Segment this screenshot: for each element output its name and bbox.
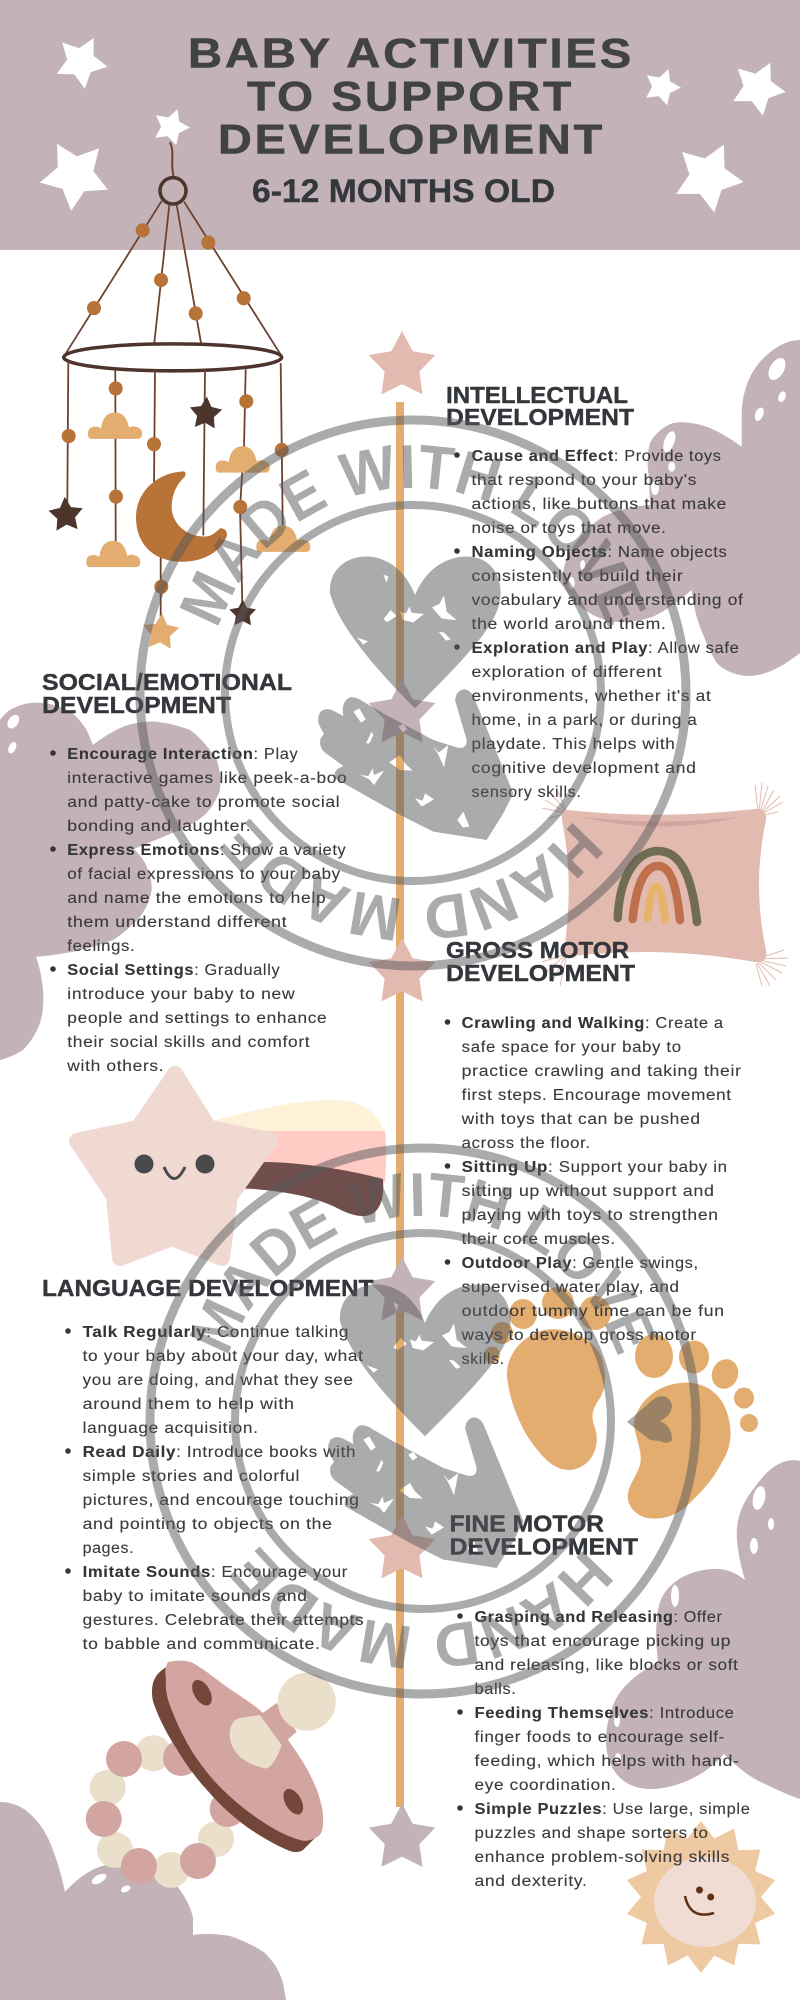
list: fine motor activities: feeding, which helps with hand- (474, 1753, 740, 1770)
list: gross motor activities: skills. (462, 1351, 505, 1368)
heading: gross motor: GROSS MOTOR (446, 937, 629, 963)
header band (0, 0, 800, 250)
list: social activities: bonding and laughter. (67, 818, 251, 835)
list: intellectual activities: playdate. This helps with (472, 736, 676, 753)
watermark stamp: upper: HAND MADE (219, 818, 603, 941)
illustration: baby feet (484, 1287, 758, 1519)
list: gross motor activities: supervised water play, and (462, 1279, 680, 1296)
title: TO SUPPORT (247, 72, 574, 119)
list: gross motor activities: across the floor. (462, 1135, 591, 1152)
illustration: pacifier (86, 1661, 336, 1888)
heading: intellectual: INTELLECTUAL (446, 382, 628, 408)
timeline: stars (369, 331, 435, 1867)
title: BABY ACTIVITIES (188, 29, 634, 76)
list: language activities: to babble and communicate. (83, 1636, 321, 1653)
list: fine motor activities: enhance problem-solving skills (474, 1849, 730, 1866)
list: fine motor activities: and dexterity. (474, 1873, 588, 1890)
watermark stamp: lower: MADE WITH LOVE (190, 1172, 656, 1355)
watermark stamp: lower (146, 1144, 700, 1698)
timeline: central bar (396, 402, 404, 1807)
list: language activities (65, 1324, 364, 1653)
list: fine motor activities: balls. (474, 1681, 516, 1698)
list: social activities: their social skills and comfort (67, 1034, 310, 1051)
list: fine motor activities: Simple Puzzles : Use large, simple (474, 1801, 750, 1818)
list: language activities: Talk Regularly : Continue talking (83, 1324, 349, 1341)
list: intellectual activities: exploration of different (472, 664, 663, 681)
list: language activities: pictures, and encourage touching (83, 1492, 360, 1509)
title (188, 29, 634, 163)
list: gross motor activities: playing with toys to strengthen (462, 1207, 719, 1224)
header stars (27, 26, 794, 218)
heading: fine motor (450, 1511, 639, 1560)
list: gross motor activities (445, 1015, 742, 1368)
list: social activities: them understand different (67, 914, 287, 931)
decorative cloud: left (0, 703, 220, 1060)
list: gross motor activities: safe space for your baby to (462, 1039, 682, 1056)
list: fine motor activities: Grasping and Releasing : Offer (474, 1609, 722, 1626)
heading: intellectual (446, 382, 635, 430)
list: gross motor activities: Crawling and Walking : Create a (462, 1015, 724, 1032)
list: language activities: simple stories and colorful (83, 1468, 300, 1485)
list: intellectual activities: home, in a park, or during a (472, 712, 698, 729)
list: language activities: and pointing to objects on the (83, 1516, 333, 1533)
list: social activities: interactive games like peek-a-boo (67, 770, 347, 787)
list: fine motor activities: finger foods to encourage self- (474, 1729, 725, 1746)
subtitle: 6-12 MONTHS OLD (252, 173, 555, 209)
heading: language: LANGUAGE DEVELOPMENT (42, 1275, 374, 1301)
list: gross motor activities: outdoor tummy time can be fun (462, 1303, 725, 1320)
list: gross motor activities: sitting up without support and (462, 1183, 715, 1200)
heading: social/emotional (42, 669, 292, 718)
decorative cloud: bottom left (0, 1802, 286, 2000)
panel: language development (42, 1275, 374, 1653)
list: gross motor activities: with toys that can be pushed (461, 1111, 701, 1128)
list: intellectual activities: that respond to your baby's (472, 472, 697, 489)
list: intellectual activities: the world around them. (472, 616, 666, 633)
watermark stamp: lower: HAND MADE (230, 1546, 613, 1669)
list: language activities: gestures. Celebrate their attempts (83, 1612, 364, 1629)
list: intellectual activities: sensory skills. (472, 784, 582, 801)
list: language activities: baby to imitate sounds and (83, 1588, 308, 1605)
list: intellectual activities: Cause and Effect : Provide toys (472, 448, 722, 465)
list: language activities: pages. (83, 1540, 134, 1557)
list: language activities: Imitate Sounds : Encourage your (83, 1564, 348, 1581)
list: fine motor activities: toys that encourage picking up (474, 1633, 731, 1650)
heading: fine motor: FINE MOTOR (450, 1511, 604, 1537)
heading: fine motor: DEVELOPMENT (450, 1534, 639, 1560)
list: intellectual activities (454, 448, 744, 801)
panel: intellectual development (446, 382, 744, 801)
illustration: shooting star (77, 1074, 386, 1258)
list: gross motor activities: first steps. Encourage movement (462, 1087, 732, 1104)
list: language activities: language acquisition. (83, 1420, 259, 1437)
heading: intellectual: DEVELOPMENT (446, 404, 635, 430)
list: intellectual activities: actions, like buttons that make (472, 496, 727, 513)
list: gross motor activities: practice crawling and taking their (462, 1063, 742, 1080)
list: language activities: around them to help with (83, 1396, 295, 1413)
list: social activities: with others. (66, 1058, 164, 1075)
list: intellectual activities: cognitive development and (472, 760, 696, 777)
list: intellectual activities: consistently to build their (472, 568, 684, 585)
list: gross motor activities: their core muscles. (462, 1231, 616, 1248)
panel: gross motor development (445, 937, 742, 1368)
list: social activities: of facial expressions to your baby (67, 866, 341, 883)
list: social activities: Encourage Interaction : Play (67, 746, 298, 763)
list: intellectual activities: noise or toys that move. (472, 520, 666, 537)
illustration: baby mobile (48, 142, 310, 649)
list: intellectual activities: environments, whether it's at (472, 688, 712, 705)
list: fine motor activities: and releasing, like blocks or soft (474, 1657, 739, 1674)
heading: gross motor (446, 937, 636, 986)
list: social activities: feelings. (67, 938, 135, 955)
heading: gross motor: DEVELOPMENT (446, 960, 636, 986)
list: language activities: to your baby about your day, what (83, 1348, 364, 1365)
decorative cloud: bottom right (606, 1460, 800, 1799)
list: social activities: and patty-cake to promote social (67, 794, 340, 811)
list: fine motor activities: eye coordination. (474, 1777, 616, 1794)
list: social activities: Social Settings : Gradually (67, 962, 280, 979)
panel: social/emotional development (42, 669, 347, 1075)
list: fine motor activities: Feeding Themselves : Introduce (474, 1705, 734, 1722)
list: fine motor activities: puzzles and shape sorters to (474, 1825, 708, 1842)
list: social activities: and name the emotions to help (67, 890, 326, 907)
list: gross motor activities: Sitting Up : Support your baby in (462, 1159, 728, 1176)
list: social activities: Express Emotions : Show a variety (67, 842, 346, 859)
list: social activities: people and settings to enhance (67, 1010, 327, 1027)
list: fine motor activities (457, 1609, 750, 1890)
heading: social/emotional: SOCIAL/EMOTIONAL (42, 669, 292, 695)
watermark stamp: upper: MADE WITH LOVE (180, 444, 646, 627)
decorative cloud: top right (563, 340, 800, 676)
list: language activities: you are doing, and what they see (83, 1372, 354, 1389)
list: intellectual activities: Naming Objects : Name objects (472, 544, 728, 561)
list: language activities: Read Daily : Introduce books with (83, 1444, 356, 1461)
list: social activities (50, 746, 347, 1075)
list: gross motor activities: ways to develop gross motor (461, 1327, 697, 1344)
illustration: pillow with rainbow (542, 783, 788, 986)
illustration: smiling sun (627, 1821, 775, 1973)
title: DEVELOPMENT (218, 116, 605, 163)
list: intellectual activities: vocabulary and understanding of (472, 592, 744, 609)
list: intellectual activities: Exploration and Play : Allow safe (472, 640, 740, 657)
panel: fine motor development (450, 1511, 750, 1890)
list: social activities: introduce your baby to new (67, 986, 296, 1003)
heading: social/emotional: DEVELOPMENT (42, 692, 232, 718)
watermark stamp: upper (136, 416, 690, 970)
list: gross motor activities: Outdoor Play : Gentle swings, (462, 1255, 699, 1272)
